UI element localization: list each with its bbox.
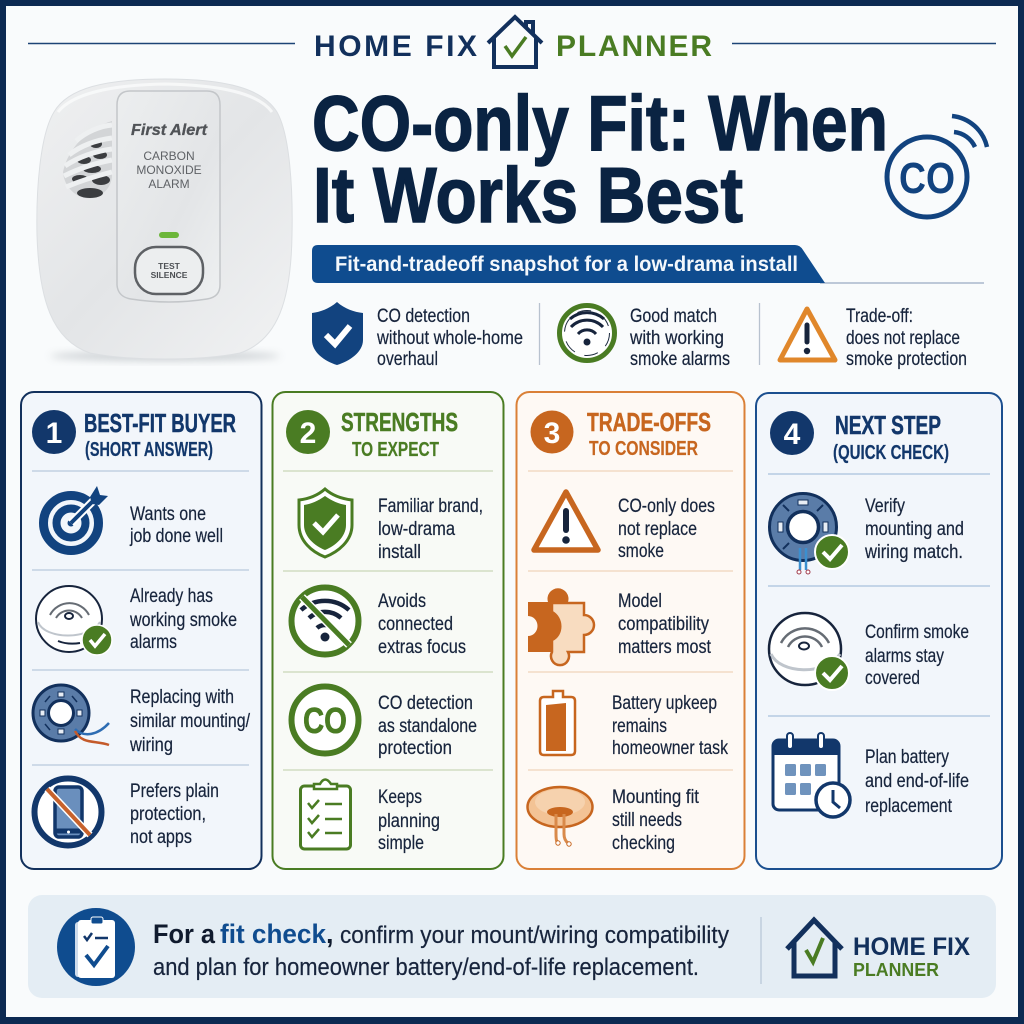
header brand logo: HOME FIX xyxy=(314,30,477,63)
text: battery xyxy=(612,693,728,759)
text: model xyxy=(618,591,712,658)
text: avoids xyxy=(378,591,466,658)
icon: wifi ring xyxy=(560,306,614,360)
text: trade-off: does not replace xyxy=(846,328,960,349)
icon: mounting plate with wires xyxy=(33,685,109,745)
text: CO-only: CO-only does xyxy=(618,496,715,517)
heading: strengths: STRENGTHS xyxy=(341,407,458,437)
heading: next step xyxy=(770,410,949,464)
subtitle banner: Fit-and-tradeoff snapshot for a low-drama install xyxy=(335,253,798,276)
text: prefers plain: protection, xyxy=(130,804,206,825)
text: replacing: Replacing with xyxy=(130,687,234,708)
text: mounting fit: still needs xyxy=(612,810,682,831)
text: trade-off xyxy=(846,306,967,370)
text: familiar brand: low-drama xyxy=(378,519,455,540)
text: familiar brand: Familiar brand, xyxy=(378,496,483,517)
text: replacing: similar mounting/ xyxy=(130,711,251,732)
text: confirm: Confirm smoke xyxy=(865,622,969,643)
text: wants one xyxy=(129,504,223,547)
product photo: carbon monoxide alarm: ALARM xyxy=(148,177,190,191)
text: plan battery: Plan battery xyxy=(865,747,949,768)
text: keeps: Keeps xyxy=(378,787,422,808)
text: plan battery: and end-of-life xyxy=(865,771,969,792)
text: plan battery: replacement xyxy=(865,796,953,817)
text: verify: wiring match. xyxy=(864,542,963,563)
icon: warning triangle xyxy=(534,492,598,550)
header brand logo: PLANNER xyxy=(556,30,712,63)
footer brand logo: HOME FIX xyxy=(853,933,970,961)
heading: next step: NEXT STEP xyxy=(835,410,941,440)
icon: mounting plate check xyxy=(770,494,849,574)
heading: strengths: TO EXPECT xyxy=(352,439,439,461)
product photo: carbon monoxide alarm: SILENCE xyxy=(151,270,188,280)
heading: strengths xyxy=(286,407,458,461)
icon: target xyxy=(44,486,108,550)
text: replacing: wiring xyxy=(129,735,173,756)
text: fit check message: and plan for homeowner battery/end-of-life replacement. xyxy=(153,954,699,981)
heading: trade-offs: TRADE-OFFS xyxy=(587,407,711,437)
text: CO detection: as standalone xyxy=(378,716,477,737)
text: keeps: planning xyxy=(378,811,440,832)
icon: CO ring xyxy=(292,686,358,754)
text: trade-off: Trade-off: xyxy=(846,306,913,327)
text: prefers plain: Prefers plain xyxy=(130,781,219,802)
text: prefers plain xyxy=(130,781,219,848)
text: battery: homeowner task xyxy=(612,738,728,759)
icon: no phone apps xyxy=(34,778,102,846)
heading: best-fit buyer xyxy=(32,408,236,461)
text: CO-only: smoke xyxy=(618,541,664,562)
footer brand logo: PLANNER xyxy=(853,960,939,980)
heading: trade-offs: TO CONSIDER xyxy=(589,438,698,460)
text: mounting fit: checking xyxy=(612,833,675,854)
text: fit check message: , xyxy=(326,919,334,949)
product photo: carbon monoxide alarm: CARBON xyxy=(143,149,195,163)
panel: strengths xyxy=(272,392,504,869)
text: CO-only: not replace xyxy=(618,519,697,540)
text: battery: remains xyxy=(612,716,667,737)
text: CO detection: CO detection xyxy=(377,306,470,327)
heading: strengths: 2 xyxy=(300,417,316,450)
heading: best-fit buyer: 1 xyxy=(46,417,62,450)
text: CO detection: CO detection xyxy=(378,693,473,714)
text: fit check message: confirm your mount/wiring compatibility xyxy=(340,922,729,949)
heading: best-fit buyer: BEST-FIT BUYER xyxy=(84,408,236,438)
text: keeps: simple xyxy=(378,833,424,854)
header brand logo xyxy=(28,17,996,67)
text: wants one: job done well xyxy=(129,526,223,547)
title: It Works Best xyxy=(313,151,743,239)
icon: battery xyxy=(540,691,575,755)
text: already has: Already has xyxy=(130,586,213,607)
text: wants one: Wants one xyxy=(130,504,206,525)
product photo: carbon monoxide alarm: MONOXIDE xyxy=(136,163,202,177)
panel: trade-offs xyxy=(516,392,744,869)
text: prefers plain: not apps xyxy=(130,827,192,848)
title: CO-only Fit: When xyxy=(312,79,888,167)
text: model: matters most xyxy=(618,637,712,658)
text: familiar brand xyxy=(378,496,483,563)
icon: CO ring: CO xyxy=(303,700,347,741)
icon: no wifi xyxy=(292,588,358,654)
icon: CO signal: CO xyxy=(899,154,955,203)
text: CO detection: protection xyxy=(378,738,452,759)
text: model: Model xyxy=(618,591,662,612)
text: avoids: extras focus xyxy=(378,637,466,658)
text: avoids: Avoids xyxy=(378,591,426,612)
text: CO detection xyxy=(378,693,477,759)
text: keeps xyxy=(378,787,440,854)
callout: fit check footer xyxy=(28,895,996,998)
text: confirm: alarms stay xyxy=(865,646,944,667)
text: avoids: connected xyxy=(378,614,453,635)
text: already has: working smoke xyxy=(129,610,237,631)
heading: best-fit buyer: (SHORT ANSWER) xyxy=(85,439,213,461)
product photo: carbon monoxide alarm xyxy=(37,79,292,361)
text: already has: alarms xyxy=(130,632,177,653)
text: mounting fit xyxy=(612,787,700,854)
panel: next step xyxy=(756,393,1002,869)
text: model: compatibility xyxy=(618,614,709,635)
icon: clipboard badge xyxy=(57,908,135,986)
panel: best-fit buyer xyxy=(21,392,262,869)
heading: trade-offs: 3 xyxy=(544,417,560,450)
icon: CO signal xyxy=(887,116,987,217)
icon: shield check xyxy=(312,302,363,365)
text: CO-only xyxy=(618,496,715,562)
text: fit check message: fit check xyxy=(220,919,327,949)
text: verify xyxy=(864,496,964,563)
subtitle banner xyxy=(312,245,984,283)
text: trade-off: smoke protection xyxy=(846,349,967,370)
icon: smoke alarm check xyxy=(769,613,849,690)
text: good match xyxy=(629,306,730,370)
heading: trade-offs xyxy=(530,407,711,460)
product photo: carbon monoxide alarm: TEST xyxy=(158,261,181,271)
footer brand logo xyxy=(787,920,970,980)
text: good match: Good match xyxy=(630,306,717,327)
fit summary strip xyxy=(312,302,967,370)
icon: mounting disc xyxy=(528,787,592,846)
text: battery: Battery upkeep xyxy=(612,693,717,714)
text: fit check message xyxy=(153,919,729,981)
icon: smoke alarm with check xyxy=(36,586,112,655)
text: good match: with working xyxy=(629,328,724,349)
text: CO detection xyxy=(376,306,523,370)
text: plan battery xyxy=(865,747,969,817)
icon: warning triangle xyxy=(780,309,835,360)
text: CO detection: overhaul xyxy=(377,349,438,370)
product photo: carbon monoxide alarm: First Alert xyxy=(131,122,208,139)
text: CO detection: without whole-home xyxy=(376,328,523,349)
text: verify: mounting and xyxy=(865,519,964,540)
text: good match: smoke alarms xyxy=(630,349,730,370)
text: familiar brand: install xyxy=(378,542,421,563)
icon: green shield xyxy=(299,489,352,557)
icon: calendar clock xyxy=(773,733,850,817)
text: verify: Verify xyxy=(865,496,905,517)
text: replacing xyxy=(129,687,251,756)
heading: next step: 4 xyxy=(784,418,801,451)
text: fit check message: For a xyxy=(153,919,216,949)
text: confirm: covered xyxy=(865,668,920,689)
title xyxy=(312,79,888,239)
icon: puzzle pieces xyxy=(528,588,594,665)
heading: next step: (QUICK CHECK) xyxy=(833,442,949,464)
text: mounting fit: Mounting fit xyxy=(612,787,700,808)
text: confirm xyxy=(865,622,969,689)
text: already has xyxy=(129,586,237,653)
icon: clipboard xyxy=(300,780,350,849)
